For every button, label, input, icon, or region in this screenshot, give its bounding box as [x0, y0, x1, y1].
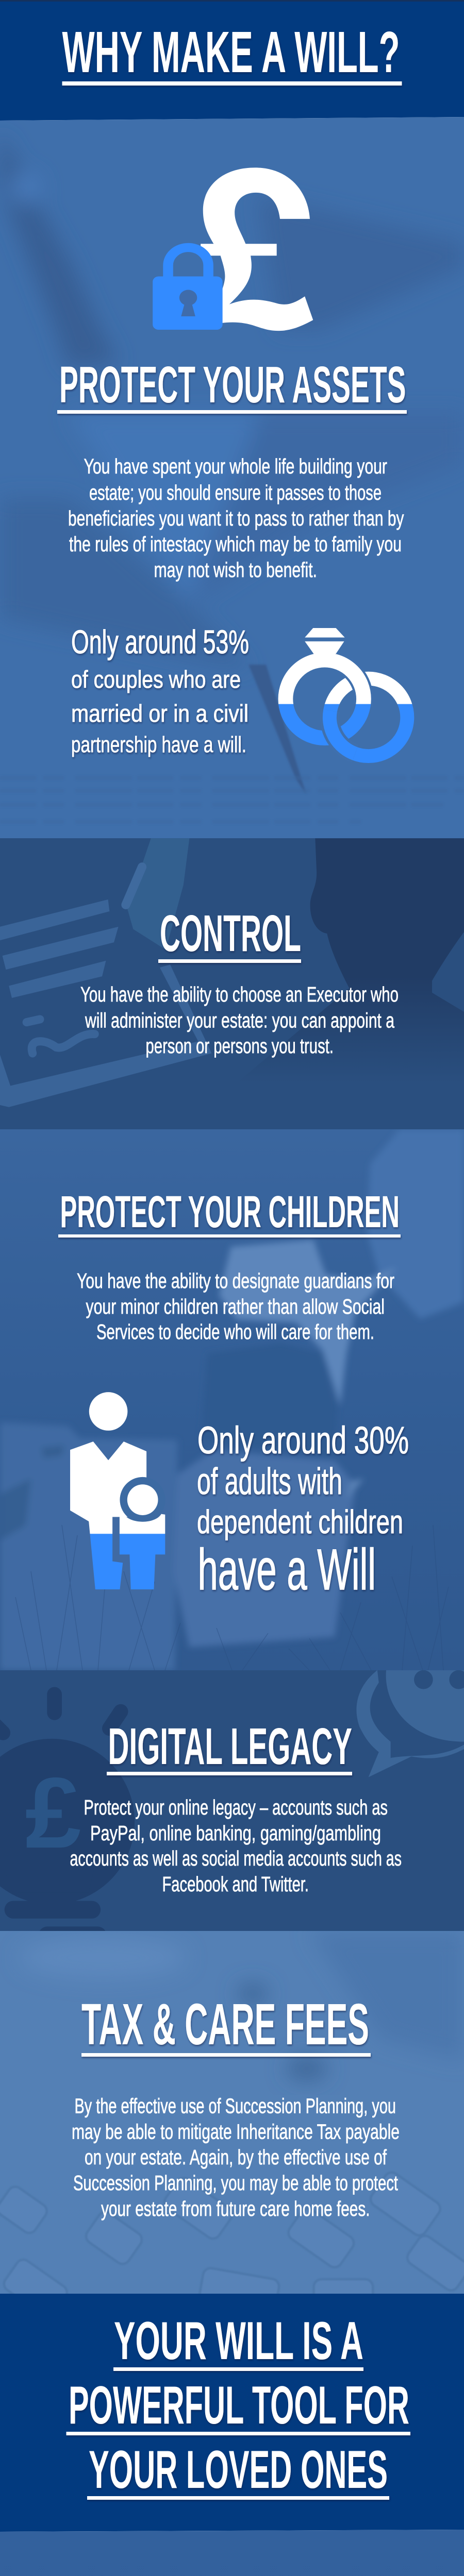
stat: 53 percent of couples: Only around 53%	[71, 623, 249, 660]
text: assets body: may not wish to benefit.	[154, 558, 317, 582]
text: digital body: Facebook and Twitter.	[162, 1872, 309, 1896]
stat: 53 percent of couples: of couples who are	[71, 666, 241, 693]
stat: 53 percent of couples	[71, 623, 249, 757]
panel: protect your assets	[0, 117, 464, 838]
icon: parent and child	[70, 1392, 165, 1589]
panel: digital legacy: £	[25, 1757, 81, 1869]
icon: pound and padlock	[153, 167, 313, 331]
heading: digital legacy	[107, 1718, 352, 1775]
text: control body	[80, 982, 399, 1058]
text: tax body: your estate from future care home fees.	[101, 2197, 370, 2221]
heading: your will is a powerful tool	[66, 2311, 410, 2500]
panel: your will is a powerful tool	[0, 2294, 464, 2532]
stat: 30 percent of adults	[197, 1419, 409, 1602]
stat: 53 percent of couples: partnership have a will.	[71, 732, 246, 757]
heading: control: CONTROL	[160, 905, 301, 962]
stat: 30 percent of adults: of adults with	[197, 1461, 342, 1502]
panel: benefits of a will	[0, 2530, 464, 2576]
panel: protect your children	[0, 1129, 464, 1670]
text: tax body	[72, 2094, 400, 2221]
panel: title band	[0, 0, 464, 121]
stat: 53 percent of couples: married or in a civil	[71, 700, 248, 727]
text: control body: person or persons you trust.	[145, 1034, 334, 1058]
icon: wedding rings	[286, 628, 407, 756]
text: children body	[77, 1269, 394, 1344]
panel: control	[0, 838, 464, 1129]
heading: control	[158, 905, 301, 963]
text: assets body	[68, 454, 404, 582]
panel: tax and care fees	[0, 1931, 464, 2294]
panel: digital legacy	[0, 1670, 464, 1931]
text: digital body	[70, 1795, 402, 1896]
